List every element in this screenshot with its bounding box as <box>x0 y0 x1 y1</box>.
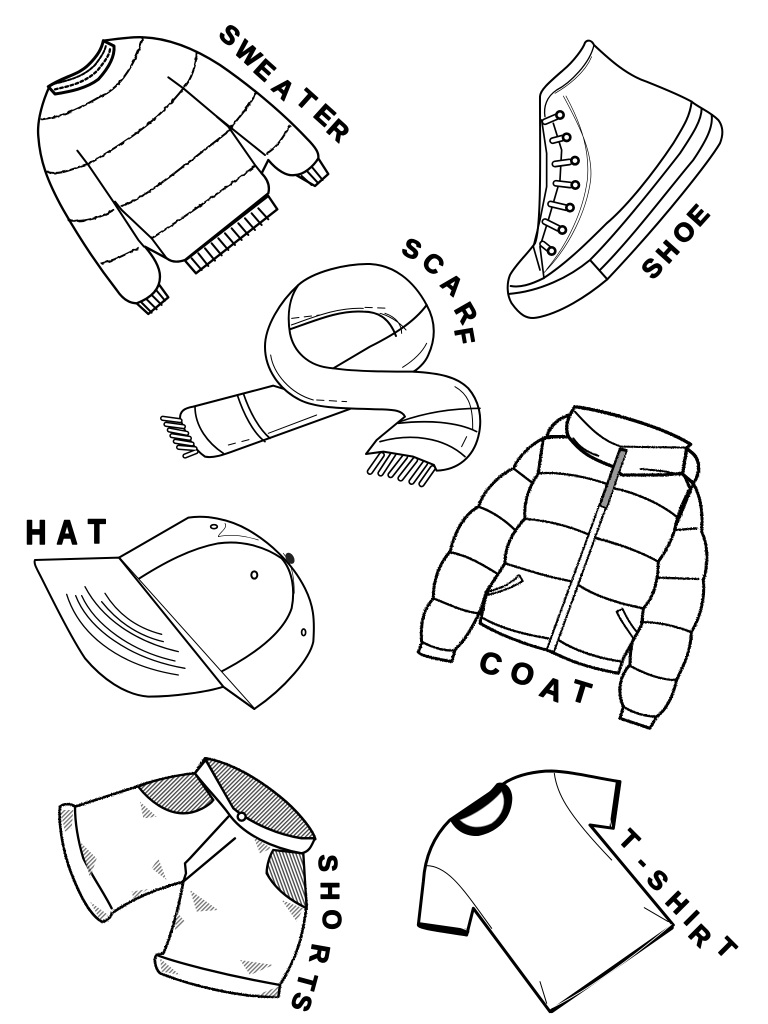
shoe collar <box>545 45 594 117</box>
coat left sleeve <box>418 438 543 662</box>
hat crown <box>119 517 314 709</box>
hat brim edge <box>119 558 254 709</box>
scarf inner fold <box>289 285 427 372</box>
sweater collar <box>48 41 114 94</box>
icon: hat <box>35 517 314 709</box>
shoe laces <box>543 117 570 249</box>
coat right sleeve <box>620 483 707 728</box>
coat stripes <box>422 468 698 717</box>
t-shirt cuffs <box>420 783 618 932</box>
label: sweater: SWEATER <box>213 18 356 148</box>
coat hood <box>547 407 575 437</box>
sweater silhouette <box>38 37 318 303</box>
icon: t-shirt <box>418 771 673 1012</box>
scarf left tail <box>180 386 350 457</box>
scarf details <box>271 308 473 447</box>
icon: shorts <box>60 758 315 997</box>
shorts shading <box>60 802 303 997</box>
label: scarf: SCARF <box>398 232 484 346</box>
icon: shoe <box>508 41 722 318</box>
hat brim arcs <box>67 587 185 675</box>
t-shirt hem <box>552 928 672 1011</box>
label: hat: HAT <box>26 512 106 552</box>
shoe tongue <box>533 120 562 278</box>
sweater stripes <box>42 38 290 263</box>
label: coat: COAT <box>475 645 594 711</box>
scarf fringe right <box>370 454 433 484</box>
sweater left cuff <box>137 285 168 314</box>
sweater arm lines <box>77 77 265 258</box>
scarf left fringe <box>163 418 196 456</box>
coat body <box>480 435 690 673</box>
scarf loop and right tail <box>265 264 480 471</box>
icon: sweater <box>38 37 328 314</box>
shorts waistband <box>195 760 315 853</box>
shorts waistband inside <box>205 758 315 838</box>
scarf left stripes <box>195 393 270 453</box>
shoe silhouette <box>508 41 722 318</box>
t-shirt collar <box>450 783 512 836</box>
coat zipper <box>547 448 627 652</box>
hat panels <box>134 542 293 676</box>
coat pockets <box>487 575 523 595</box>
shoe eyelets <box>548 111 579 255</box>
t-shirt body <box>418 771 673 1012</box>
label: t-shirt: T-SHIRT <box>613 823 743 964</box>
shorts hatched pockets <box>138 773 213 813</box>
icon: scarf <box>163 264 480 484</box>
label: shoe: SHOE <box>635 199 715 285</box>
shorts silhouette <box>60 758 315 997</box>
coat collar <box>567 407 691 475</box>
hat button and eyelets <box>284 551 296 566</box>
hat brim <box>35 558 254 709</box>
shorts fly and cuffs <box>75 807 280 985</box>
shoe sole lines <box>508 102 712 294</box>
t-shirt folds <box>426 773 668 1003</box>
shorts button <box>238 813 246 821</box>
sweater hem rib <box>185 196 277 273</box>
sweater right cuff <box>296 158 328 186</box>
icon: coat <box>418 407 707 728</box>
label: shorts: SHORTS <box>285 854 347 1016</box>
